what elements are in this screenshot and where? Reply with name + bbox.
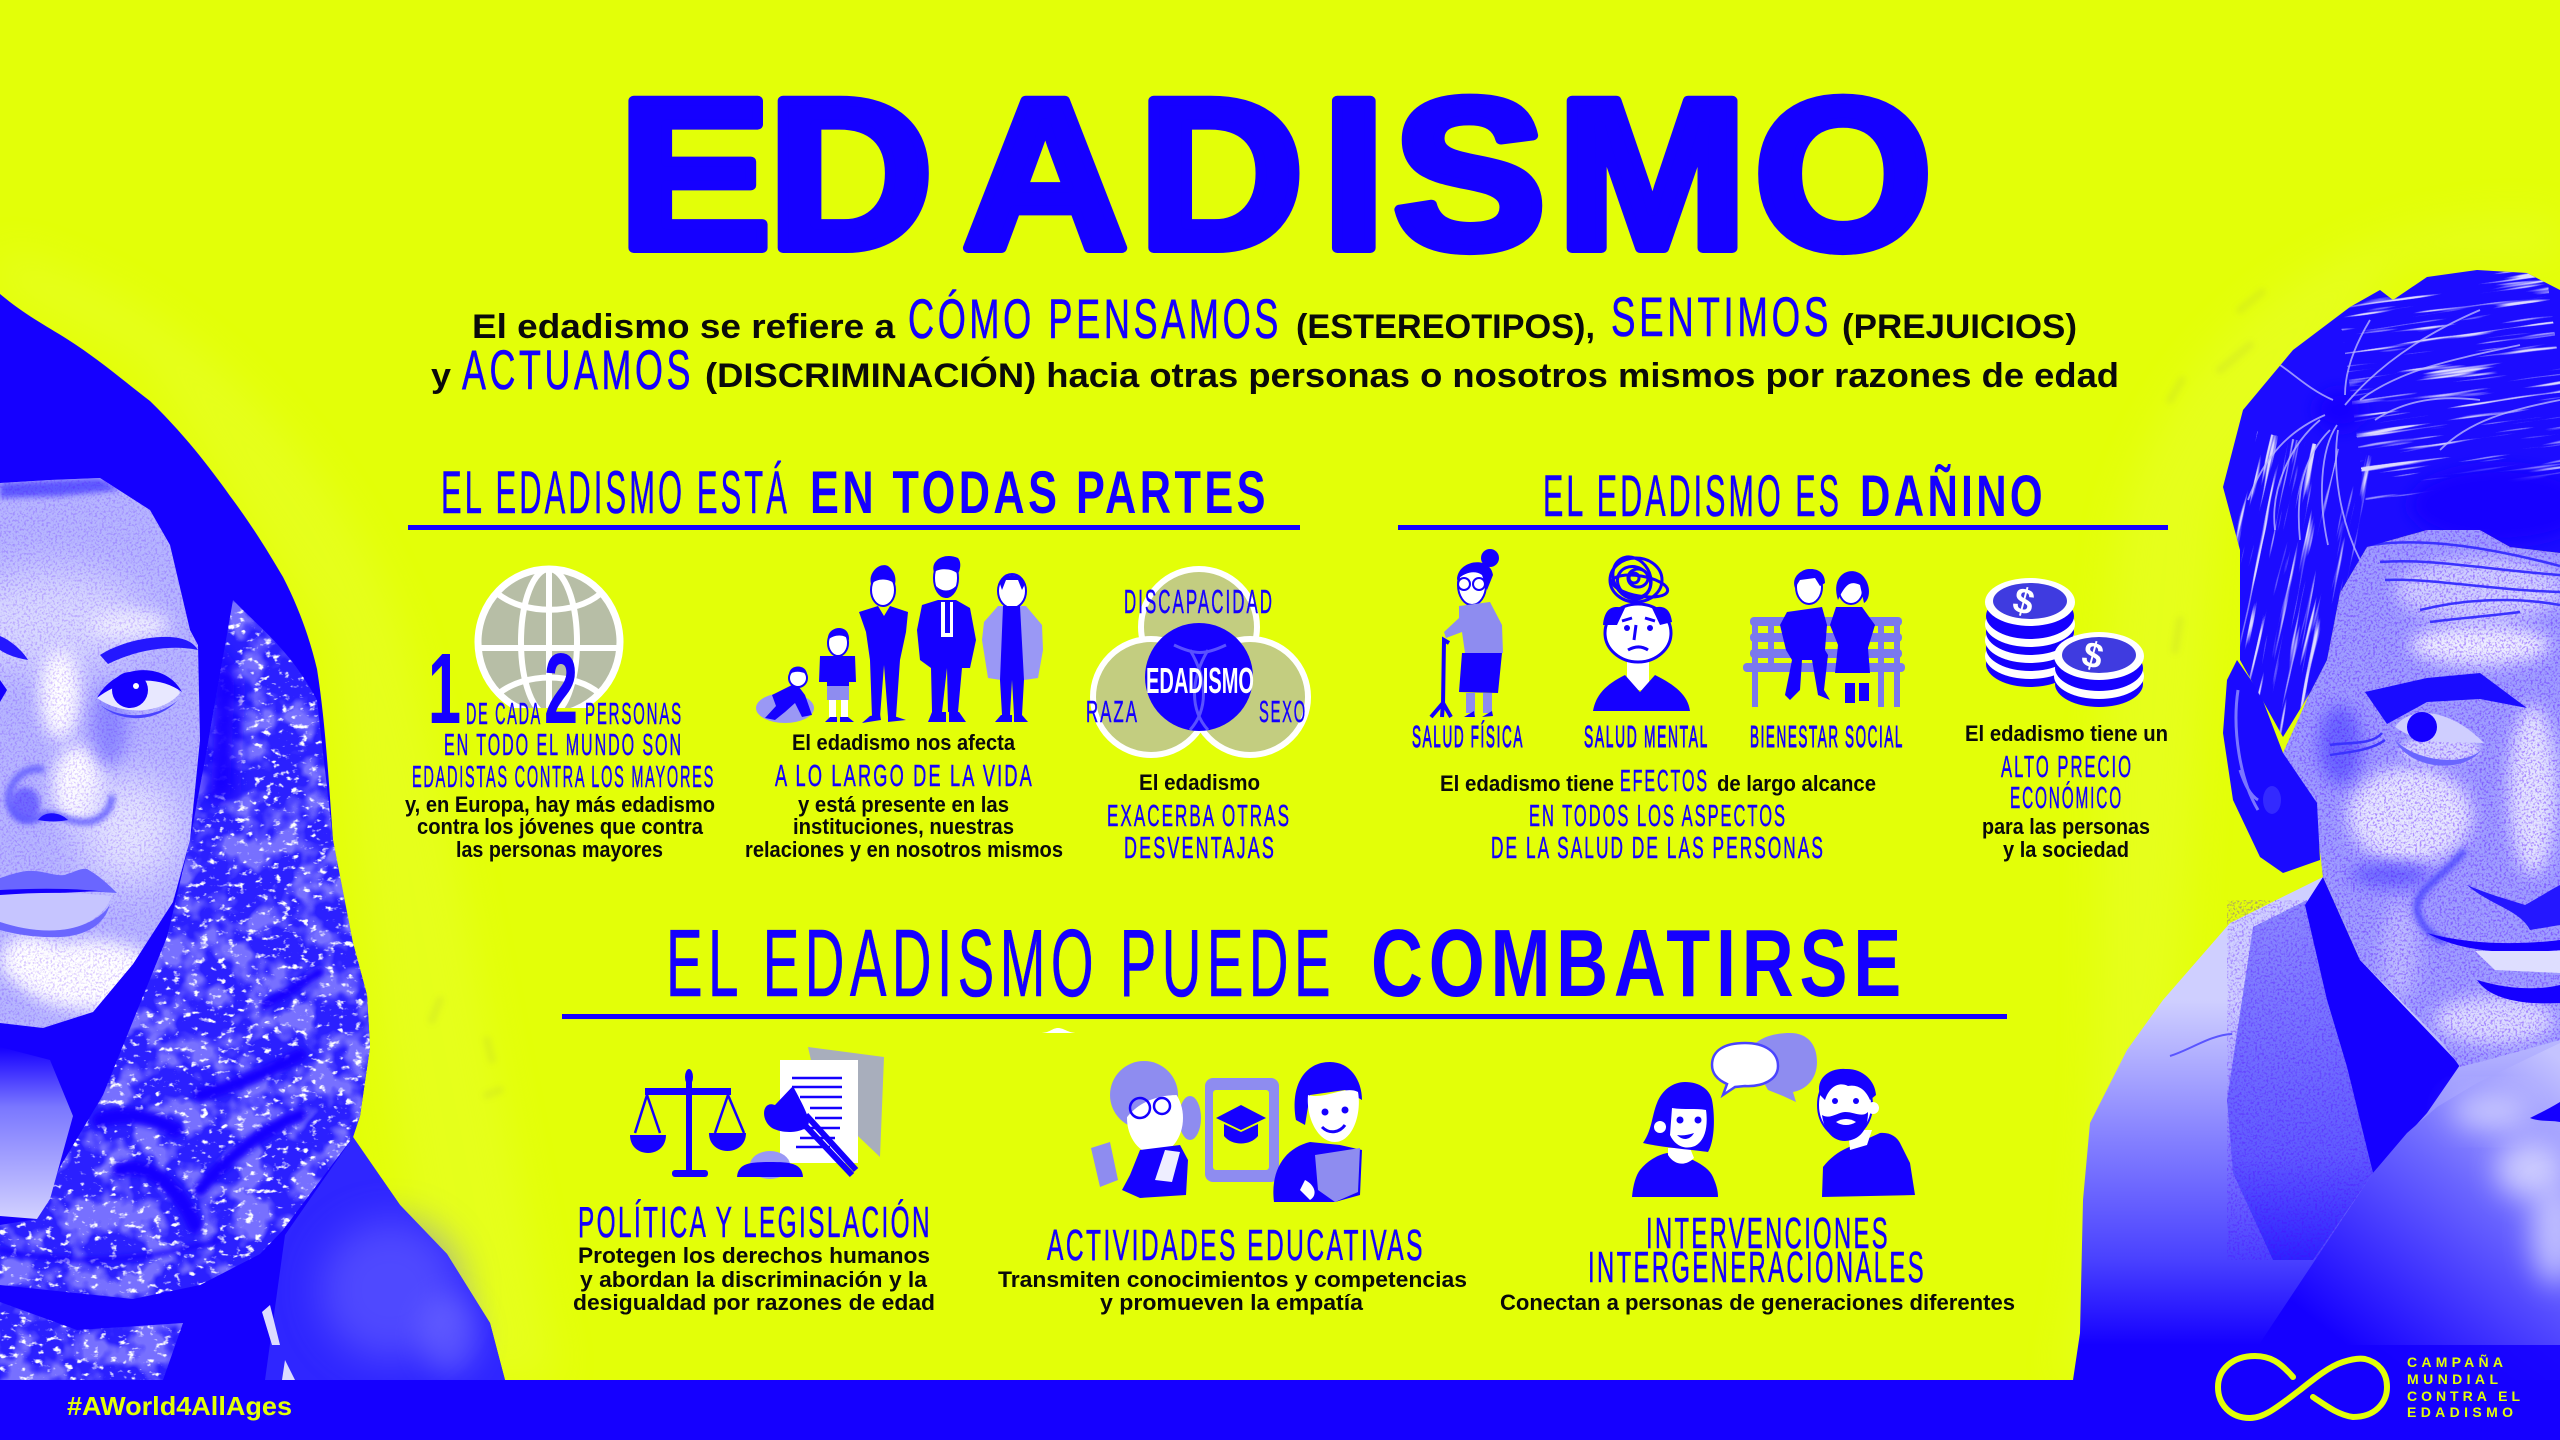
text: a lo largo de la vida: A LO LARGO DE LA VIDA	[775, 758, 1034, 793]
text: politica y legislacion: Protegen los derechos humanos	[578, 1243, 930, 1268]
portrait: older man	[2073, 256, 2560, 1380]
icon: older woman with cane	[1431, 549, 1503, 717]
venn diagram: RAZA	[1086, 694, 1139, 729]
icon: intergenerational conversation	[1632, 1033, 1915, 1197]
forehead lines	[2330, 542, 2560, 755]
campaign label: CAMPAÑA	[2407, 1353, 2503, 1370]
heading: puede combatirse: COMBATIRSE	[1371, 910, 1907, 1017]
text: efectos de largo alcance	[1440, 763, 1876, 865]
collar	[2227, 900, 2373, 1260]
campaign label: CONTRA EL	[2407, 1388, 2520, 1404]
heading: en todas partes: EN TODAS PARTES	[810, 459, 1269, 526]
text: politica y legislacion: y abordan la discriminación y la	[580, 1267, 928, 1292]
stat: 1 de cada 2: 2	[544, 633, 578, 745]
title: EDADISMO	[618, 54, 1932, 293]
text: a lo largo de la vida: instituciones, nuestras	[793, 814, 1014, 839]
text: politica y legislacion	[573, 1198, 935, 1315]
icon: people across ages	[756, 556, 1043, 723]
bottom band	[0, 1380, 2560, 1440]
text: a lo largo de la vida: y está presente en las	[798, 792, 1009, 817]
hashtag: #AWorld4AllAges	[67, 1391, 292, 1421]
nose	[8, 769, 112, 822]
hand	[2240, 1043, 2560, 1380]
icon: coin stacks: $	[2009, 579, 2039, 623]
text: actividades educativas	[998, 1221, 1467, 1315]
stat: 1 de cada 2: y, en Europa, hay más edadismo	[405, 792, 715, 817]
text: intervenciones intergeneracionales: Conectan a personas de generaciones diferentes	[1500, 1290, 2015, 1315]
brow and socket	[2365, 673, 2527, 724]
left eyebrow	[100, 637, 198, 664]
text: alto precio económico: y la sociedad	[2003, 837, 2129, 862]
neck	[0, 1047, 73, 1219]
text: efectos de largo alcance: de largo alcance	[1717, 771, 1876, 796]
jacket	[265, 1137, 505, 1380]
text: a lo largo de la vida: relaciones y en nosotros mismos	[745, 837, 1063, 862]
text: a lo largo de la vida	[745, 730, 1063, 862]
text: politica y legislacion: POLÍTICA Y LEGISLACIÓN	[578, 1198, 932, 1247]
labels: health dimensions: SALUD MENTAL	[1584, 719, 1709, 754]
heading: dañino: DAÑINO	[1860, 464, 2046, 529]
nose base	[2467, 885, 2560, 930]
mouth	[2427, 933, 2560, 952]
text: efectos de largo alcance: EN TODOS LOS ASPECTOS	[1529, 798, 1787, 833]
intro text: (DISCRIMINACIÓN) hacia otras personas o nosotros mismos por razones de edad	[705, 357, 2119, 395]
labels: health dimensions: SALUD FÍSICA	[1412, 719, 1524, 754]
text: efectos de largo alcance: EFECTOS	[1620, 763, 1709, 798]
text: alto precio económico: para las personas	[1982, 814, 2150, 839]
icon: scales and gavel	[630, 1047, 884, 1179]
text: efectos de largo alcance: DE LA SALUD DE LAS PERSONAS	[1491, 830, 1825, 865]
text: actividades educativas: y promueven la empatía	[1100, 1290, 1364, 1315]
text: exacerba otras desventajas	[1107, 770, 1291, 865]
hair	[2223, 270, 2560, 737]
intro text: El edadismo se refiere a	[472, 308, 896, 346]
text: EDADISTAS CONTRA LOS MAYORES	[412, 759, 715, 794]
campaign label: MUNDIAL	[2407, 1371, 2498, 1387]
icon: older man with tangled thoughts	[1593, 550, 1690, 711]
icon: infinity logo	[2218, 1356, 2387, 1418]
stat: 1 de cada 2: PERSONAS	[585, 696, 683, 731]
shoulder	[2073, 877, 2560, 1380]
labels: health dimensions	[1412, 719, 1904, 754]
venn diagram: EDADISMO	[1146, 660, 1254, 701]
text: exacerba otras desventajas: EXACERBA OTRAS	[1107, 798, 1291, 833]
intro text: CÓMO PENSAMOS	[908, 287, 1282, 350]
venn diagram: DISCAPACIDAD	[1124, 583, 1274, 620]
face	[0, 478, 200, 1028]
lips	[0, 869, 117, 893]
venn diagram	[1086, 569, 1308, 755]
text: SEXO	[1259, 694, 1307, 729]
icon: learners with tablet	[1091, 1061, 1362, 1202]
heading: puede combatirse: EL EDADISMO PUEDE	[666, 910, 1336, 1017]
text: exacerba otras desventajas: DESVENTAJAS	[1124, 830, 1276, 865]
heading: dañino: EL EDADISMO ES	[1543, 464, 1842, 529]
icon: couple on a bench	[1743, 569, 1905, 707]
text: actividades educativas: ACTIVIDADES EDUCATIVAS	[1047, 1221, 1425, 1270]
stat: 1 de cada 2: las personas mayores	[456, 837, 663, 862]
icon: globe	[478, 569, 620, 715]
stat: 1 de cada 2: contra los jóvenes que contra	[417, 814, 704, 839]
ear	[2223, 660, 2320, 873]
intro text: y	[431, 357, 451, 395]
right eye	[2395, 713, 2484, 743]
campaign label	[2407, 1353, 2520, 1420]
intro text: (ESTEREOTIPOS),	[1296, 308, 1595, 346]
campaign label: EDADISMO	[2407, 1404, 2513, 1420]
stat: 1 de cada 2: 1	[428, 633, 461, 745]
icon: coin stacks: $	[2078, 633, 2108, 677]
face	[2283, 530, 2560, 1067]
text: politica y legislacion: desigualdad por razones de edad	[573, 1290, 935, 1315]
text: intervenciones intergeneracionales: INTERGENERACIONALES	[1588, 1243, 1926, 1292]
icon: coin stacks	[1985, 578, 2144, 707]
text: efectos de largo alcance: El edadismo tiene	[1440, 771, 1614, 796]
text: actividades educativas: Transmiten conocimientos y competencias	[998, 1267, 1467, 1292]
intro text	[431, 285, 2119, 401]
text: BIENESTAR SOCIAL	[1750, 719, 1904, 754]
heading: en todas partes: EL EDADISMO ESTÁ	[441, 459, 790, 526]
text: alto precio económico: ALTO PRECIO	[2001, 749, 2133, 784]
intro text: ACTUAMOS	[462, 338, 694, 401]
nasolabial fold	[2417, 850, 2465, 942]
text: alto precio económico	[1965, 721, 2168, 862]
stat: 1 de cada 2: EN TODO EL MUNDO SON	[444, 727, 683, 762]
intro text: (PREJUICIOS)	[1842, 308, 2077, 346]
eye	[97, 674, 180, 710]
text: intervenciones intergeneracionales: INTERVENCIONES	[1646, 1209, 1890, 1258]
neck	[2305, 877, 2460, 1173]
stat: 1 de cada 2: DE CADA	[466, 696, 542, 731]
text: alto precio económico: ECONÓMICO	[2010, 780, 2123, 815]
text: alto precio económico: El edadismo tiene un	[1965, 721, 2168, 746]
stat: 1 de cada 2	[405, 633, 715, 862]
intro text: SENTIMOS	[1611, 285, 1832, 348]
text: a lo largo de la vida: El edadismo nos afecta	[792, 730, 1016, 755]
portrait: young woman	[0, 294, 505, 1385]
text: exacerba otras desventajas: El edadismo	[1139, 770, 1260, 795]
text: intervenciones intergeneracionales	[1500, 1209, 2015, 1315]
